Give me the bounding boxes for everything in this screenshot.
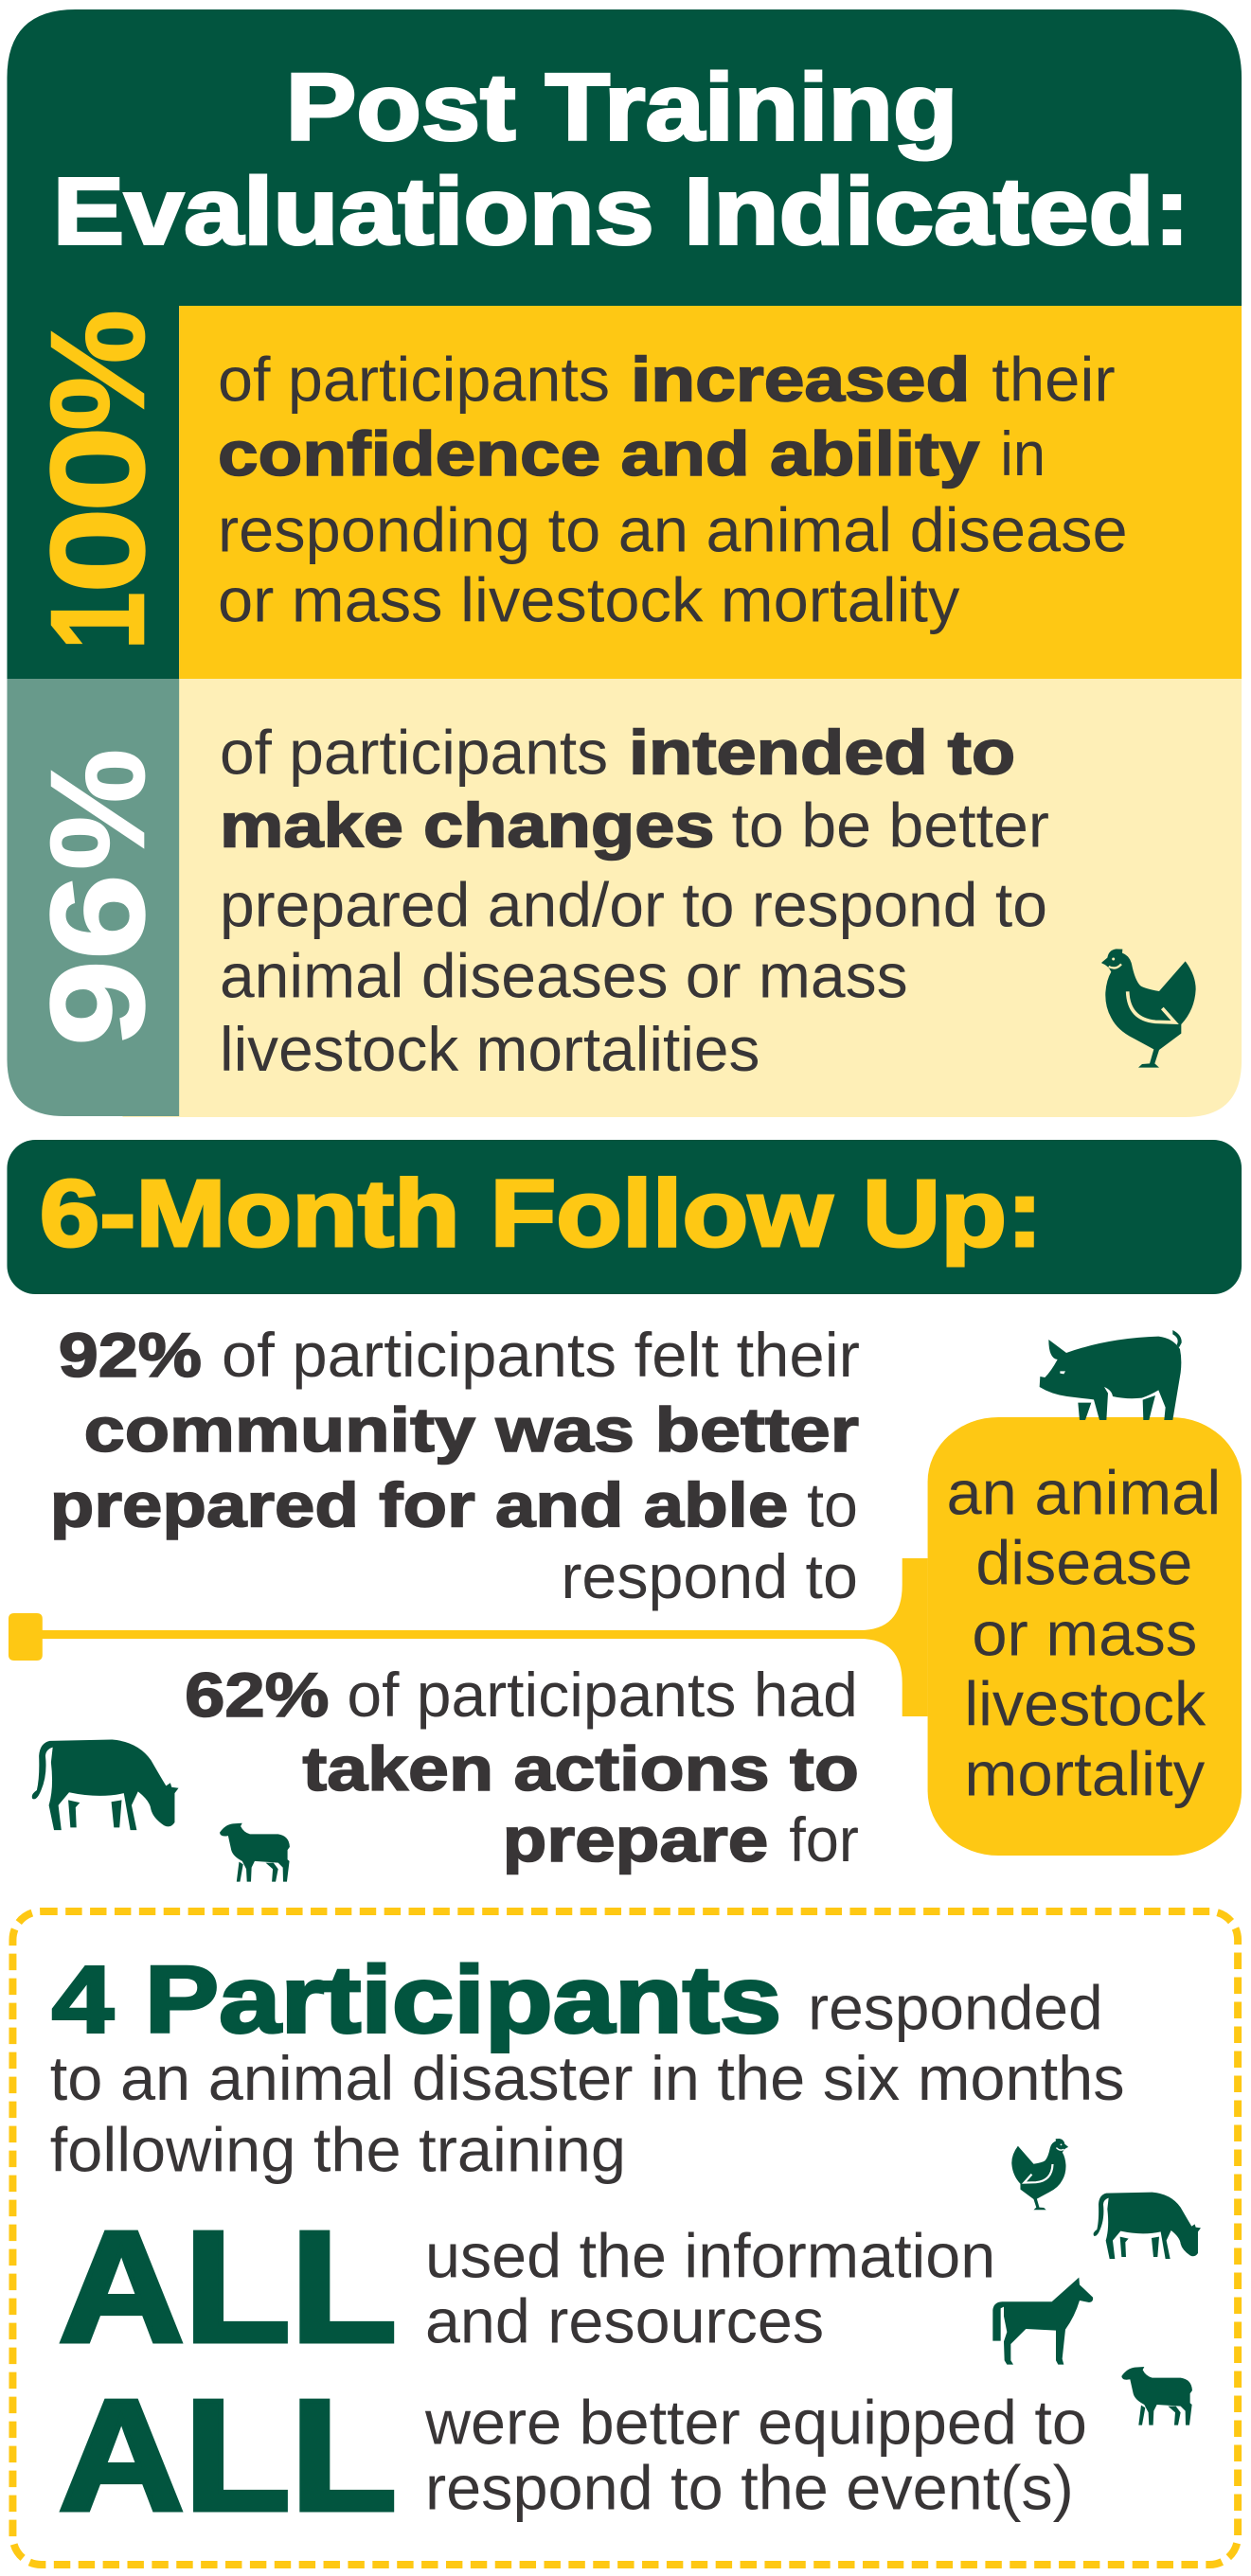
text: 4 participants responded (50, 1947, 1125, 2185)
stat: 100%: 0 (24, 426, 171, 512)
muted green stat column (7, 679, 179, 1116)
text: 92 percent finding: community was better (84, 1395, 859, 1465)
text: 92 percent finding: respond to (561, 1541, 858, 1611)
text: 62 percent finding: prepare (503, 1804, 768, 1874)
text: 100 percent description: or mass livestock mortality (218, 564, 959, 635)
stat: ALL used the information: and resources (425, 2285, 824, 2356)
icon: cow (32, 1740, 179, 1830)
text: 62 percent finding: 62% (185, 1660, 329, 1730)
dashed border (12, 1911, 1238, 2565)
text: 4 participants responded: to an animal disaster in the six months (50, 2043, 1125, 2113)
stat: ALL were better equipped (59, 2368, 1087, 2544)
callout: animal disease or mass livestock mortality (928, 1417, 1242, 1856)
panel: follow up findings (9, 1320, 1242, 1882)
stat: ALL were better equipped: respond to the event(s) (425, 2452, 1074, 2523)
text: 100 percent description: increased (631, 344, 970, 415)
icon: small sheep (1121, 2367, 1192, 2425)
stat: ALL were better equipped: ALL (59, 2368, 397, 2544)
icon: sheep (220, 1823, 290, 1882)
title: Post Training (286, 55, 957, 161)
stat: ALL used the information (59, 2199, 995, 2375)
heading bar: 6-month follow up: 6-Month Follow Up: (40, 1162, 1043, 1267)
text: 92 percent finding (50, 1320, 860, 1611)
green header background (7, 9, 1242, 679)
callout: animal disease or mass livestock mortality: an animal (946, 1457, 1221, 1528)
stat: ALL used the information: used the information (425, 2220, 995, 2291)
stat: 96%: % (24, 749, 171, 870)
icon: small cow (1094, 2193, 1201, 2259)
stat: 96%: 9 (24, 960, 171, 1046)
text: 96 percent description: prepared and/or to respond to (220, 869, 1047, 940)
callout: animal disease or mass livestock mortality: livestock (964, 1668, 1206, 1739)
pale yellow background (122, 679, 1242, 1117)
text: 100 percent description: their (992, 344, 1116, 415)
text: 62 percent finding (185, 1660, 859, 1874)
panel: 96 percent statement (7, 679, 1242, 1117)
icon: horse (992, 2278, 1093, 2365)
text: 4 participants responded: 4 Participants (52, 1947, 781, 2053)
text: 96 percent description: livestock mortalities (220, 1014, 760, 1084)
text: 92 percent finding: prepared for and able (50, 1469, 788, 1540)
stat: ALL used the information: ALL (59, 2199, 397, 2375)
stat: 100%: 0 (24, 507, 171, 594)
text: 96 percent description: to be better (732, 790, 1049, 861)
panel: participants responding (12, 1911, 1238, 2565)
text: 4 participants responded: following the training (50, 2114, 626, 2185)
icon: small chicken (1011, 2139, 1068, 2210)
text: 4 participants responded: responded (808, 1972, 1103, 2043)
title: Evaluations Indicated: (53, 159, 1189, 265)
stat: 100%: 1 (24, 592, 171, 650)
yellow background (179, 306, 1242, 679)
stat: ALL were better equipped: were better equipped to (424, 2387, 1087, 2458)
text: 92 percent finding: of participants felt their (222, 1320, 860, 1390)
heading bar: 6-month follow up (7, 1140, 1242, 1294)
text: 96 percent description: of participants (220, 717, 608, 788)
text: 100 percent description: responding to an animal disease (218, 494, 1128, 565)
text: 96 percent description: animal diseases or mass (220, 940, 908, 1011)
panel: 100 percent statement (24, 306, 1242, 679)
text: 96 percent description: make changes (220, 790, 715, 861)
text: 92 percent finding: to (807, 1469, 858, 1540)
callout: animal disease or mass livestock mortality: or mass (972, 1598, 1197, 1669)
icon: chicken (1101, 949, 1196, 1068)
text: 62 percent finding: for (789, 1804, 859, 1874)
text: 62 percent finding: taken actions to (303, 1733, 859, 1803)
callout: animal disease or mass livestock mortality: disease (975, 1527, 1192, 1598)
text: 100 percent description: of participants (218, 344, 610, 415)
icon: pig (1040, 1330, 1182, 1420)
text: 62 percent finding: of participants had (347, 1660, 858, 1730)
stat: 96%: 6 (24, 874, 171, 960)
text: 92 percent finding: 92% (59, 1320, 202, 1390)
title (53, 55, 1189, 265)
callout: animal disease or mass livestock mortality: mortality (964, 1738, 1205, 1809)
panel: post training evaluations (7, 9, 1242, 1117)
text: 96 percent description (220, 717, 1049, 1084)
text: 96 percent description: intended to (629, 717, 1015, 788)
text: 100 percent description: confidence and ability (218, 418, 980, 489)
stat: 100%: % (24, 310, 171, 431)
text: 100 percent description (218, 344, 1128, 635)
connector line from callout (9, 1558, 928, 1716)
stat: 100% (24, 310, 171, 650)
text: 100 percent description: in (1000, 418, 1045, 489)
stat: 96% (24, 749, 171, 1046)
